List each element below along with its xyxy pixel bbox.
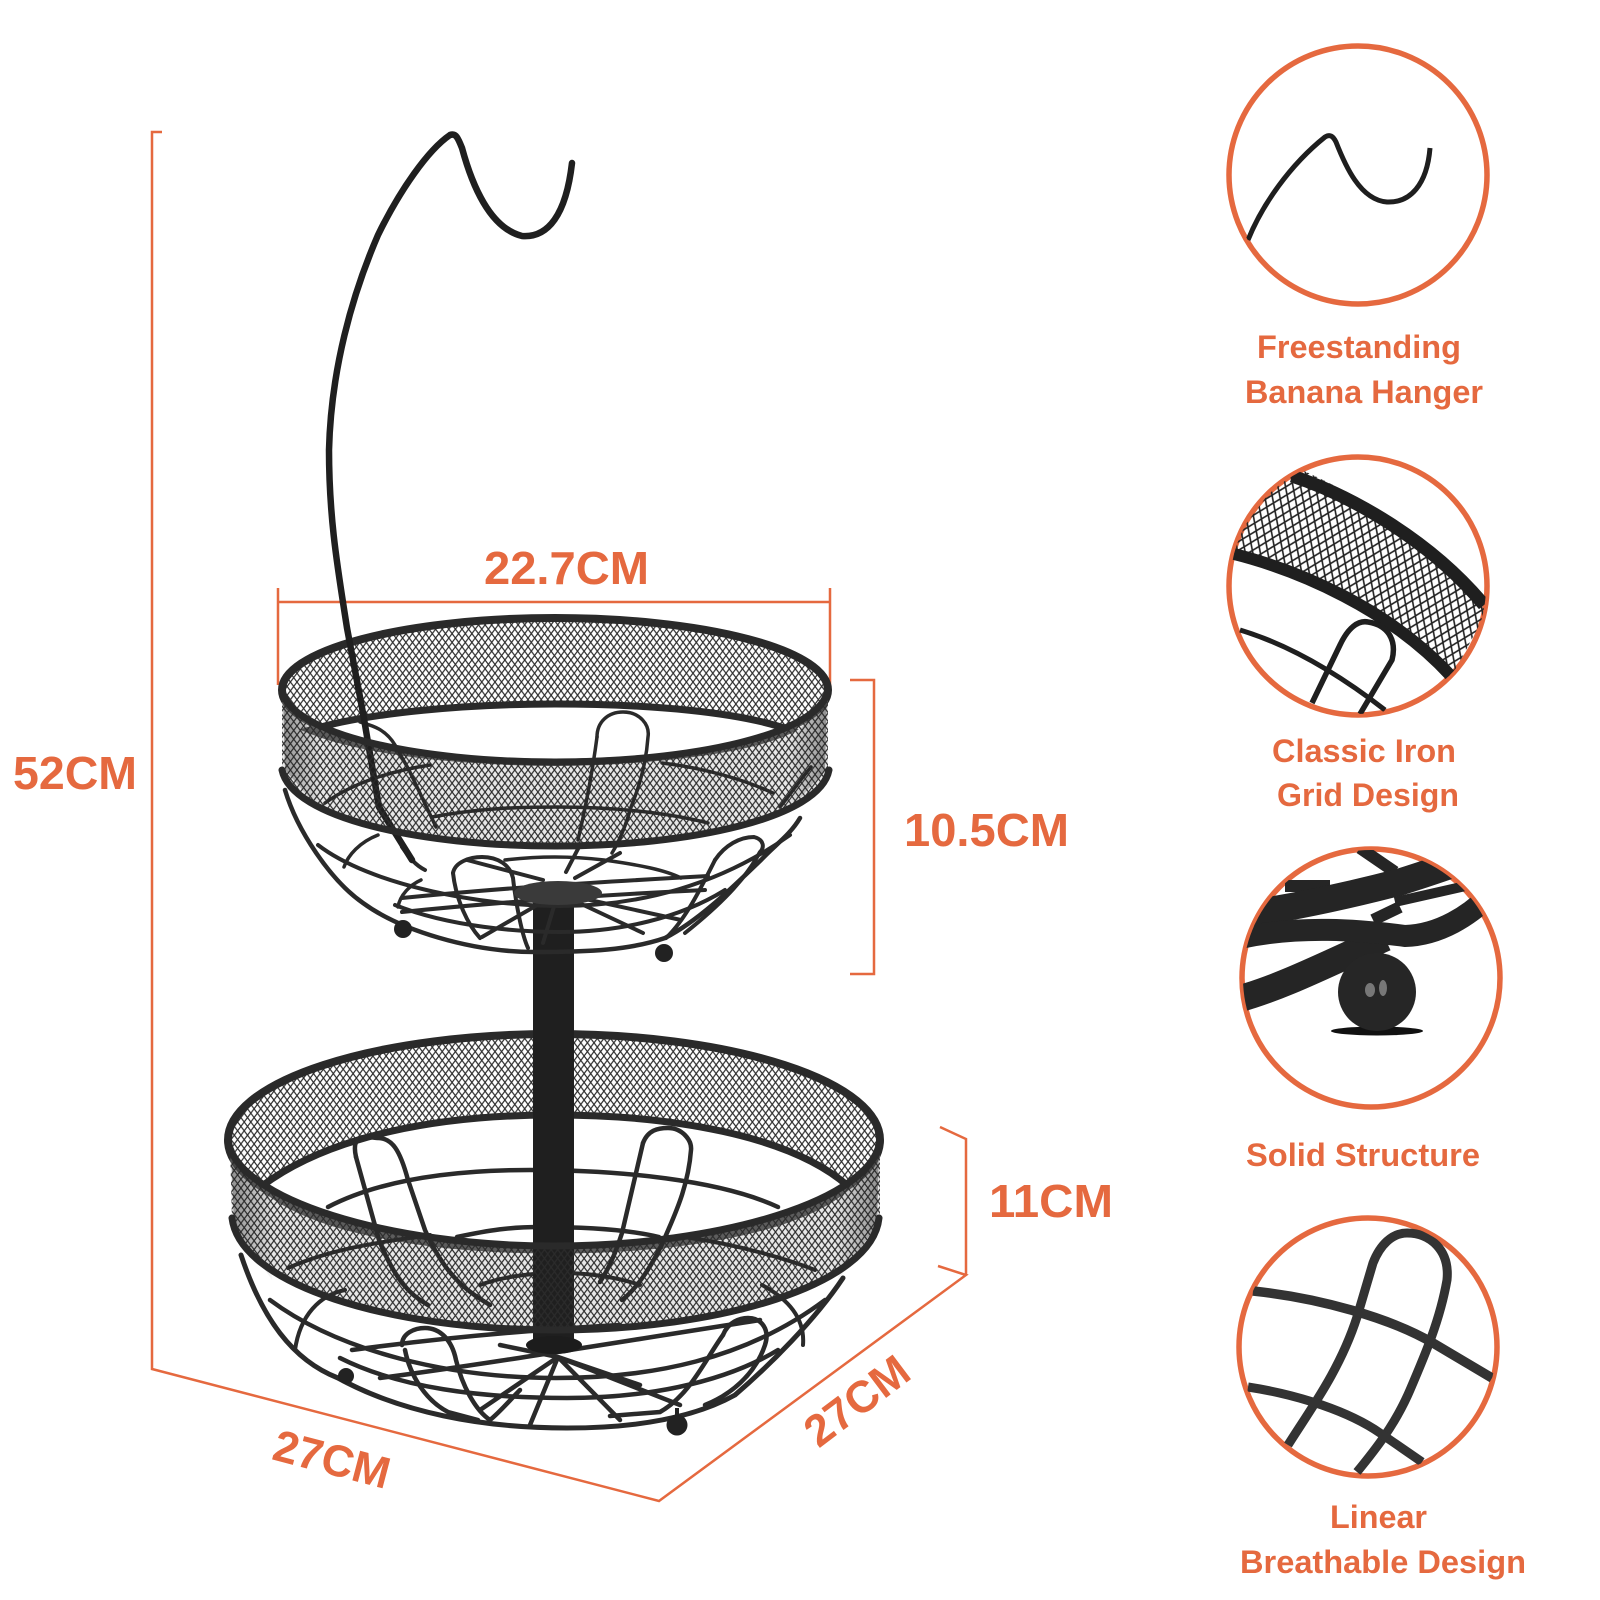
back mesh band — [282, 618, 828, 762]
support hub — [514, 881, 602, 905]
front mesh band — [282, 692, 828, 846]
caption: Classic Iron — [1272, 733, 1456, 769]
left band shade — [283, 695, 322, 810]
label: 22.7CM: 22.7CM — [484, 542, 649, 594]
caption — [1272, 733, 1459, 813]
dimension: total height bracket and base lines — [152, 132, 966, 1501]
back mesh band — [228, 1034, 880, 1246]
caption: Linear — [1330, 1499, 1427, 1535]
caption: Banana Hanger — [1245, 374, 1483, 410]
front band tint — [230, 1145, 880, 1330]
left band shade — [231, 1150, 275, 1280]
bowl wires — [241, 1128, 843, 1428]
front mesh band — [230, 1145, 880, 1330]
circle detail: grid — [1225, 457, 1490, 715]
circle detail: ball foot — [1235, 848, 1500, 1107]
label: 52CM: 52CM — [13, 747, 137, 799]
basket interior — [310, 704, 790, 762]
basket interior — [262, 1115, 848, 1250]
circle detail: wires — [1239, 1218, 1497, 1476]
callout: solid structure — [1235, 848, 1500, 1173]
base hub — [526, 1336, 582, 1354]
caption: Grid Design — [1277, 777, 1459, 813]
feet — [394, 920, 673, 962]
banana hanger — [329, 135, 572, 860]
right band shade — [835, 1150, 879, 1280]
callout: linear design — [1239, 1218, 1526, 1580]
rims — [282, 690, 828, 762]
callout: iron grid — [1225, 457, 1490, 813]
feet — [338, 1368, 688, 1436]
caption — [1240, 1499, 1526, 1580]
label: 27CM right: 27CM — [795, 1346, 919, 1457]
circle detail: hanger — [1229, 46, 1487, 304]
bowl wires — [285, 712, 811, 952]
lower basket — [228, 900, 880, 1436]
callout: banana hanger — [1229, 46, 1487, 410]
centre pillar — [533, 900, 574, 1345]
band side shading — [231, 1150, 879, 1280]
caption — [1245, 329, 1483, 410]
upper basket — [282, 135, 829, 962]
label: 10.5CM: 10.5CM — [904, 804, 1069, 856]
rims — [228, 1140, 880, 1246]
front band tint — [282, 692, 828, 846]
caption: Solid Structure — [1246, 1137, 1480, 1173]
caption: Freestanding — [1257, 329, 1461, 365]
label: 27CM left: 27CM — [268, 1421, 395, 1499]
label: 11CM: 11CM — [989, 1175, 1113, 1227]
caption: Breathable Design — [1240, 1544, 1526, 1580]
right band shade — [788, 695, 827, 810]
